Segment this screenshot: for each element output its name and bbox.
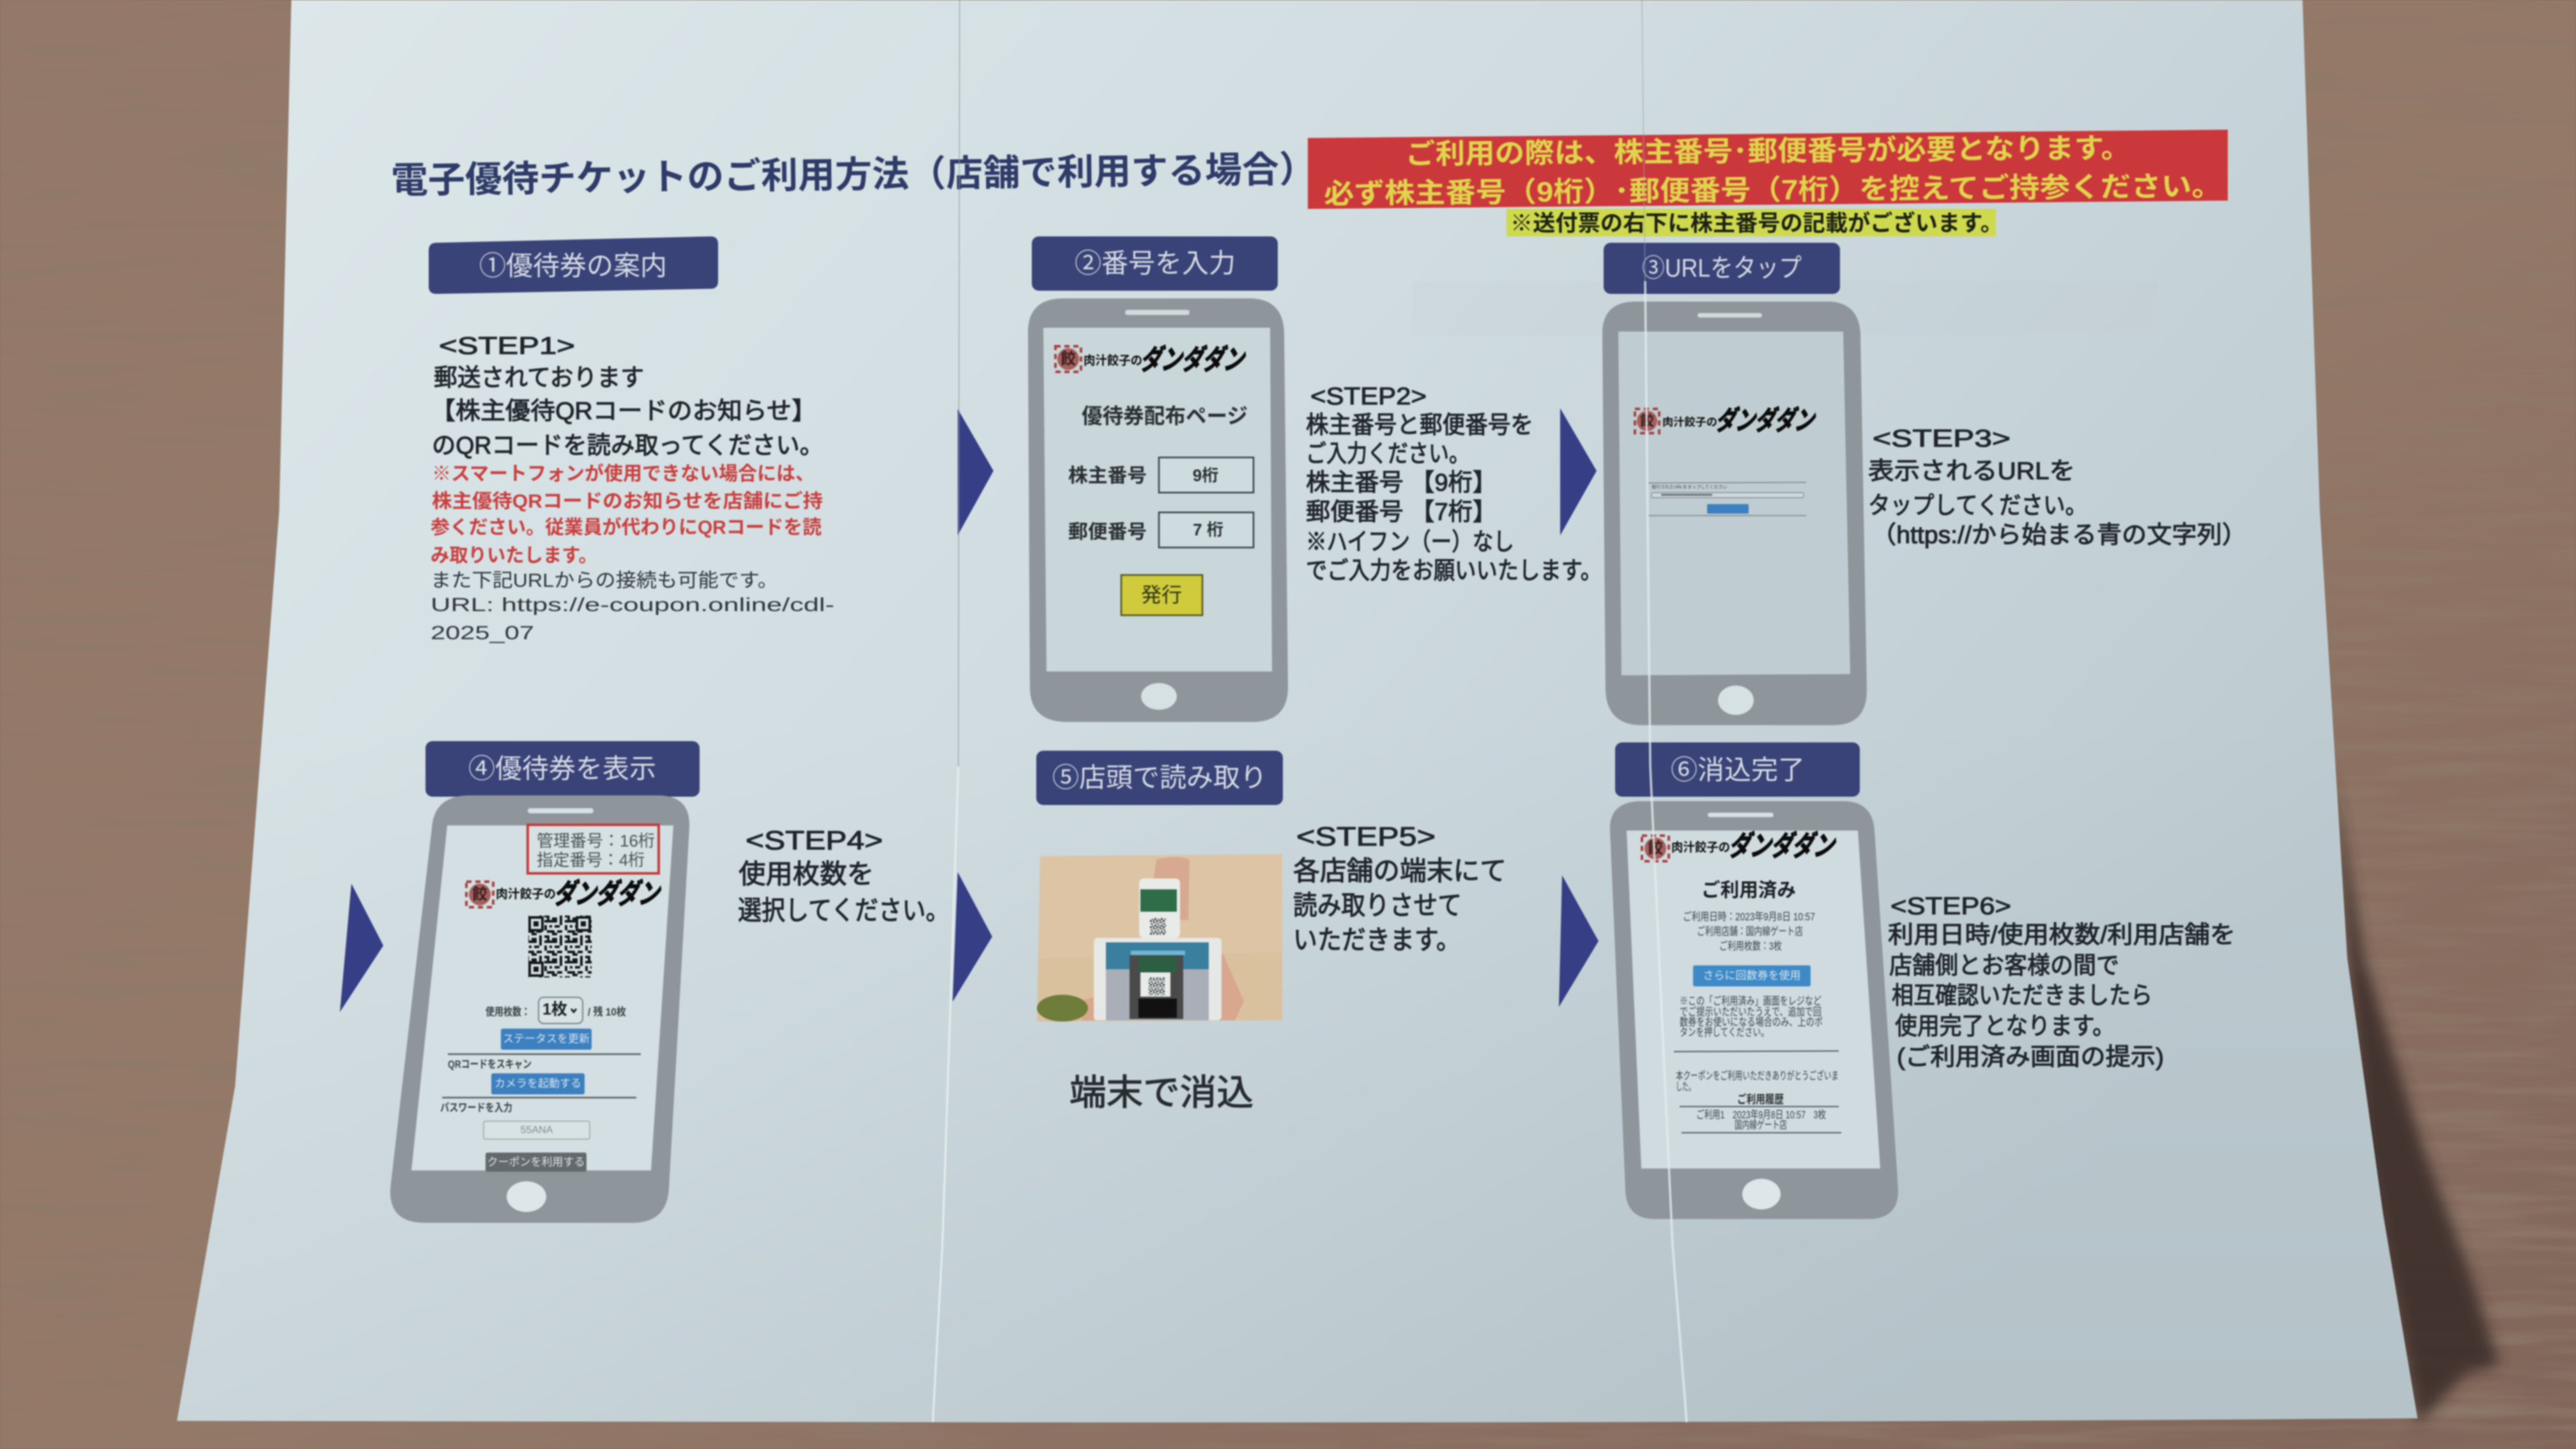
- brand logo: 肉汁餃子の: [496, 887, 556, 901]
- heading pill 5: [1036, 751, 1283, 805]
- step 4 heading: <STEP4>: [746, 825, 883, 855]
- heading pill 6: ⑥消込完了: [1671, 755, 1805, 785]
- shareholder number field: 株主番号: [1068, 465, 1147, 487]
- notice banner: yellow: [1506, 209, 2003, 236]
- password input: 55ANA: [521, 1124, 553, 1136]
- step 2 body: でご入力をお願いいたします。: [1306, 558, 1602, 585]
- notice banner: red: [1308, 130, 2228, 210]
- heading pill 1: [429, 236, 718, 294]
- camera button: [491, 1073, 585, 1094]
- plant: [1037, 995, 1088, 1022]
- panel: step 4 text: [738, 825, 949, 925]
- use more button: さらに回数券を使用: [1703, 969, 1800, 981]
- step 6 heading: <STEP6>: [1890, 893, 2011, 920]
- heading pill 2: ②番号を入力: [1075, 248, 1236, 279]
- QR scan label: QRコードをスキャン: [448, 1058, 532, 1071]
- arrow: step 4 to 5: [953, 872, 992, 1002]
- step 1 URL note: また下記URLからの接続も可能です。: [431, 570, 778, 592]
- arrow: step 1 to 2: [958, 409, 993, 535]
- lower hand: [1214, 952, 1244, 1020]
- usage history: ご利用履歴: [1737, 1092, 1784, 1106]
- step 3 body: （https://から始まる青の文字列）: [1871, 522, 2247, 549]
- ticket count selector: / 残 10枚: [588, 1006, 626, 1018]
- thank-you note: した。: [1676, 1081, 1695, 1092]
- step 3 heading: <STEP3>: [1873, 425, 2011, 452]
- page title: 優待券配布ページ: [1082, 404, 1248, 428]
- thank-you note: [1676, 1070, 1839, 1092]
- phone 6: used screen: [1610, 801, 1898, 1219]
- brand logo: [466, 878, 666, 910]
- URL form: [1648, 482, 1806, 516]
- thank-you note: 本クーポンをご利用いただきありがとうございま: [1676, 1070, 1839, 1082]
- step 6 body: [1888, 922, 2235, 1071]
- step 4 body: 選択してください。: [738, 896, 949, 925]
- panel: step 5 text: [1293, 822, 1506, 954]
- status button: [501, 1029, 592, 1050]
- step 2 body: [1306, 412, 1602, 585]
- issue button: 発行: [1141, 583, 1182, 606]
- notice line 1: ご利用の際は、株主番号･郵便番号が必要となります。: [1406, 133, 2131, 170]
- brand logo: [1642, 830, 1841, 862]
- postal code field: 7 桁: [1193, 520, 1223, 539]
- ticket count selector: 1枚: [542, 1000, 567, 1018]
- use coupon button: クーポンを利用する: [487, 1156, 585, 1168]
- step 4 body: 使用枚数を: [739, 859, 874, 889]
- step 5 body: いただきます。: [1293, 925, 1460, 954]
- step 2 body: 株主番号と郵便番号を: [1306, 412, 1533, 439]
- step 5 body: [1293, 856, 1506, 954]
- brand logo: 餃: [472, 885, 487, 903]
- arrow: step 5 to 6: [1559, 875, 1598, 1007]
- ticket count selector: 使用枚数：: [486, 1006, 530, 1018]
- usage details: ご利用枚数：3枚: [1719, 940, 1782, 952]
- usage details: ご利用日時：2023年9月8日 10:57: [1683, 911, 1815, 923]
- step 1 red note: [431, 463, 823, 566]
- customer phone: [1139, 878, 1180, 938]
- step 2 body: ご入力ください。: [1306, 441, 1469, 468]
- note paragraph: タンを押してください。: [1680, 1026, 1769, 1039]
- heading pill 6: [1615, 742, 1860, 797]
- step 2 body: 株主番号 【9桁】: [1306, 470, 1497, 496]
- step 6 body: 相互確認いただきましたら: [1892, 983, 2152, 1009]
- brand logo: ダンダダン: [1138, 344, 1250, 376]
- panel: step 6 text: [1888, 893, 2235, 1071]
- postal code field: 郵便番号: [1068, 521, 1147, 543]
- upper hand: [1154, 857, 1190, 920]
- step 1 red note: み取りいたします。: [431, 546, 597, 566]
- caption: clear on terminal: 端末で消込: [1070, 1072, 1254, 1113]
- step 1 red note: ※スマートフォンが使用できない場合には、: [432, 463, 815, 484]
- step 1 URL note: URL: https://e-coupon.online/cdl-: [431, 594, 834, 616]
- step 1 red note: 株主優待QRコードのお知らせを店舗にご持: [432, 491, 823, 512]
- yellow banner text: ※送付票の右下に株主番号の記載がございます。: [1510, 211, 2003, 236]
- step 2 body: ※ハイフン（ー）なし: [1306, 529, 1514, 556]
- status button: ステータスを更新: [503, 1032, 590, 1045]
- postal code field: [1068, 512, 1254, 548]
- usage history: [1680, 1092, 1841, 1133]
- issue button: [1121, 575, 1202, 615]
- step 6 body: (ご利用済み画面の提示): [1897, 1044, 2164, 1071]
- shareholder number field: [1068, 457, 1254, 493]
- step 6 body: 利用日時/使用枚数/利用店舗を: [1888, 922, 2235, 949]
- brand logo: 餃: [1640, 413, 1654, 429]
- brand logo: ダンダダン: [551, 878, 666, 910]
- note paragraph: でご提示いただいたうえで、追加で回: [1680, 1006, 1821, 1018]
- usage history: ご利用1 2023年9月8日 10:57 3枚: [1696, 1109, 1826, 1121]
- heading pill 3: [1604, 243, 1840, 294]
- panel: step 3 text: [1868, 425, 2247, 549]
- step 2 body: 郵便番号 【7桁】: [1306, 499, 1497, 526]
- step 2 heading: <STEP2>: [1310, 383, 1427, 410]
- step 3 body: [1868, 458, 2247, 549]
- brand logo: 餃: [1648, 839, 1663, 857]
- panel: step 2 text: [1306, 383, 1602, 585]
- step 1 body: 郵送されております: [434, 365, 644, 392]
- panel: step 1 text: [431, 333, 834, 644]
- management number box: 指定番号：4桁: [537, 850, 645, 870]
- URL form: 発行されたURLをタップしてください: [1652, 484, 1728, 489]
- usage details: [1683, 911, 1815, 952]
- step 5 heading: <STEP5>: [1296, 822, 1436, 851]
- step 1 body: 【株主優待QRコードのお知らせ】: [431, 398, 816, 425]
- notice line 2: 必ず株主番号（9桁）･郵便番号（7桁）を控えてご持参ください。: [1324, 171, 2222, 210]
- ticket count selector: [486, 997, 626, 1023]
- photo: scanning phone QR with tablet: [1037, 854, 1282, 1022]
- arrow: step 2 to 3: [1560, 408, 1597, 535]
- heading pill 3: ③URLをタップ: [1642, 254, 1802, 282]
- brand logo: [1055, 344, 1250, 376]
- brand logo: ダンダダン: [1713, 406, 1820, 436]
- step 1 red note: 参ください。従業員が代わりにQRコードを読: [431, 516, 822, 538]
- note paragraph: [1680, 995, 1823, 1039]
- tablet: [1094, 938, 1222, 1020]
- brand logo: [1635, 406, 1820, 436]
- management number box: 管理番号：16桁: [537, 831, 655, 850]
- phone 4: coupon screen: [390, 795, 689, 1223]
- step 1 URL note: [431, 570, 834, 644]
- brand logo: 肉汁餃子の: [1671, 841, 1730, 855]
- used heading: ご利用済み: [1701, 879, 1796, 901]
- heading pill 4: [425, 741, 700, 797]
- brand logo: 餃: [1061, 350, 1076, 368]
- title: 電子優待チケットのご利用方法（店舗で利用する場合）: [391, 149, 1316, 201]
- QR code: [528, 916, 592, 977]
- step 3 body: 表示されるURLを: [1868, 458, 2075, 485]
- heading pill 4: ④優待券を表示: [468, 754, 656, 783]
- note paragraph: ※この「ご利用済み」画面をレジなど: [1680, 995, 1821, 1007]
- heading pill 1: ①優待券の案内: [479, 250, 667, 281]
- faint show-through on the paper: [1412, 281, 2159, 335]
- step 5 body: 読み取りさせて: [1293, 891, 1462, 920]
- use coupon button: [486, 1153, 586, 1172]
- step 5 body: 各店舗の端末にて: [1293, 856, 1506, 885]
- brand logo: ダンダダン: [1726, 830, 1841, 862]
- usage details: ご利用店舗：国内線ゲート店: [1697, 925, 1803, 938]
- note paragraph: 数券をお使いになる場合のみ、上のボ: [1680, 1016, 1823, 1029]
- heading pill 5: ⑤店頭で読み取り: [1052, 763, 1267, 792]
- arrow: into step 4: [340, 884, 383, 1012]
- step 1 body: のQRコードを読み取ってください。: [432, 433, 824, 459]
- usage history: 国内線ゲート店: [1735, 1119, 1787, 1131]
- shareholder number field: 9桁: [1193, 466, 1218, 485]
- paper shadow on table: [2332, 767, 2499, 1425]
- step 3 body: タップしてください。: [1868, 493, 2087, 519]
- password label: パスワードを入力: [440, 1101, 512, 1114]
- management number box: [528, 825, 659, 873]
- phone 2: number entry: [1028, 298, 1288, 722]
- brand logo: 肉汁餃子の: [1662, 417, 1717, 428]
- use more button: [1693, 965, 1811, 986]
- phone 3: URL screen: [1602, 302, 1867, 725]
- heading pill 2: [1032, 236, 1278, 291]
- step 6 body: 使用完了となります。: [1895, 1013, 2115, 1040]
- camera button: カメラを起動する: [494, 1077, 581, 1090]
- step 4 body: [738, 859, 949, 925]
- password input: [484, 1121, 590, 1139]
- step 1 heading: <STEP1>: [439, 333, 575, 360]
- step 1 body: [431, 365, 824, 459]
- brand logo: 肉汁餃子の: [1084, 354, 1142, 368]
- step 6 body: 店舗側とお客様の間で: [1889, 953, 2119, 979]
- step 1 URL note: 2025_07: [431, 622, 534, 644]
